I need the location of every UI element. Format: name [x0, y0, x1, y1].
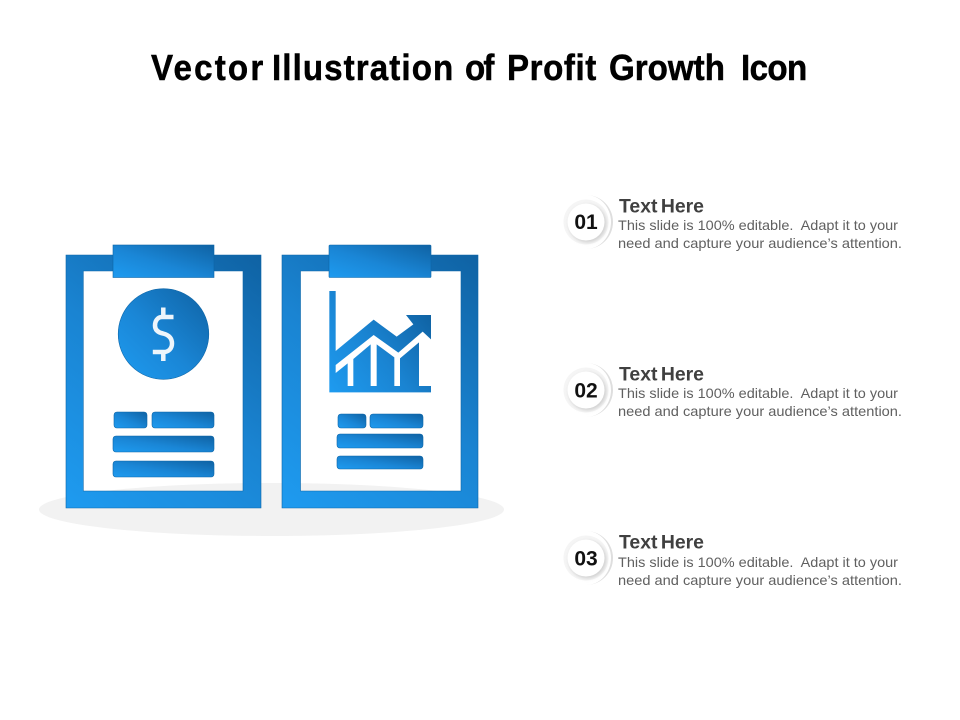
list item 01 [564, 195, 902, 251]
panel: clipboard with dollar icon [66, 245, 261, 508]
list item 03 [564, 531, 902, 588]
title: Vector [151, 49, 263, 88]
panel: clipboard with growth chart [282, 245, 478, 508]
ground shadow ellipse [39, 483, 504, 536]
title: Profit [507, 49, 597, 88]
item heading: Text Here [619, 532, 704, 554]
item description: This slide is 100% editable. Adapt it to your [618, 385, 898, 401]
item heading: Text Here [619, 196, 704, 218]
item description: need and capture your audience’s attention. [618, 235, 902, 251]
number badge [564, 531, 613, 585]
clipboard clip [113, 245, 214, 278]
clipboard board frame [66, 255, 261, 508]
number badge [564, 363, 613, 417]
text placeholder bars [337, 414, 423, 469]
number badge: 03 [574, 548, 598, 570]
title: of [465, 49, 495, 88]
clipboard clip [329, 245, 431, 278]
text placeholder bars [113, 412, 214, 477]
title: Growth [609, 49, 725, 88]
number badge: 02 [574, 380, 598, 402]
title: Icon [741, 49, 807, 88]
item heading: Text Here [619, 364, 704, 386]
number badge: 01 [574, 211, 598, 234]
title: Illustration [272, 49, 453, 88]
item description: need and capture your audience’s attention. [618, 572, 902, 588]
icon: dollar coin [118, 289, 209, 379]
icon: growth chart with arrow [329, 291, 431, 392]
clipboard board frame [282, 255, 478, 508]
item description: This slide is 100% editable. Adapt it to your [618, 554, 898, 570]
title [151, 49, 807, 88]
item description: need and capture your audience’s attention. [618, 403, 902, 419]
item description: This slide is 100% editable. Adapt it to your [618, 217, 898, 233]
number badge [564, 195, 613, 249]
list item 02 [564, 363, 902, 419]
